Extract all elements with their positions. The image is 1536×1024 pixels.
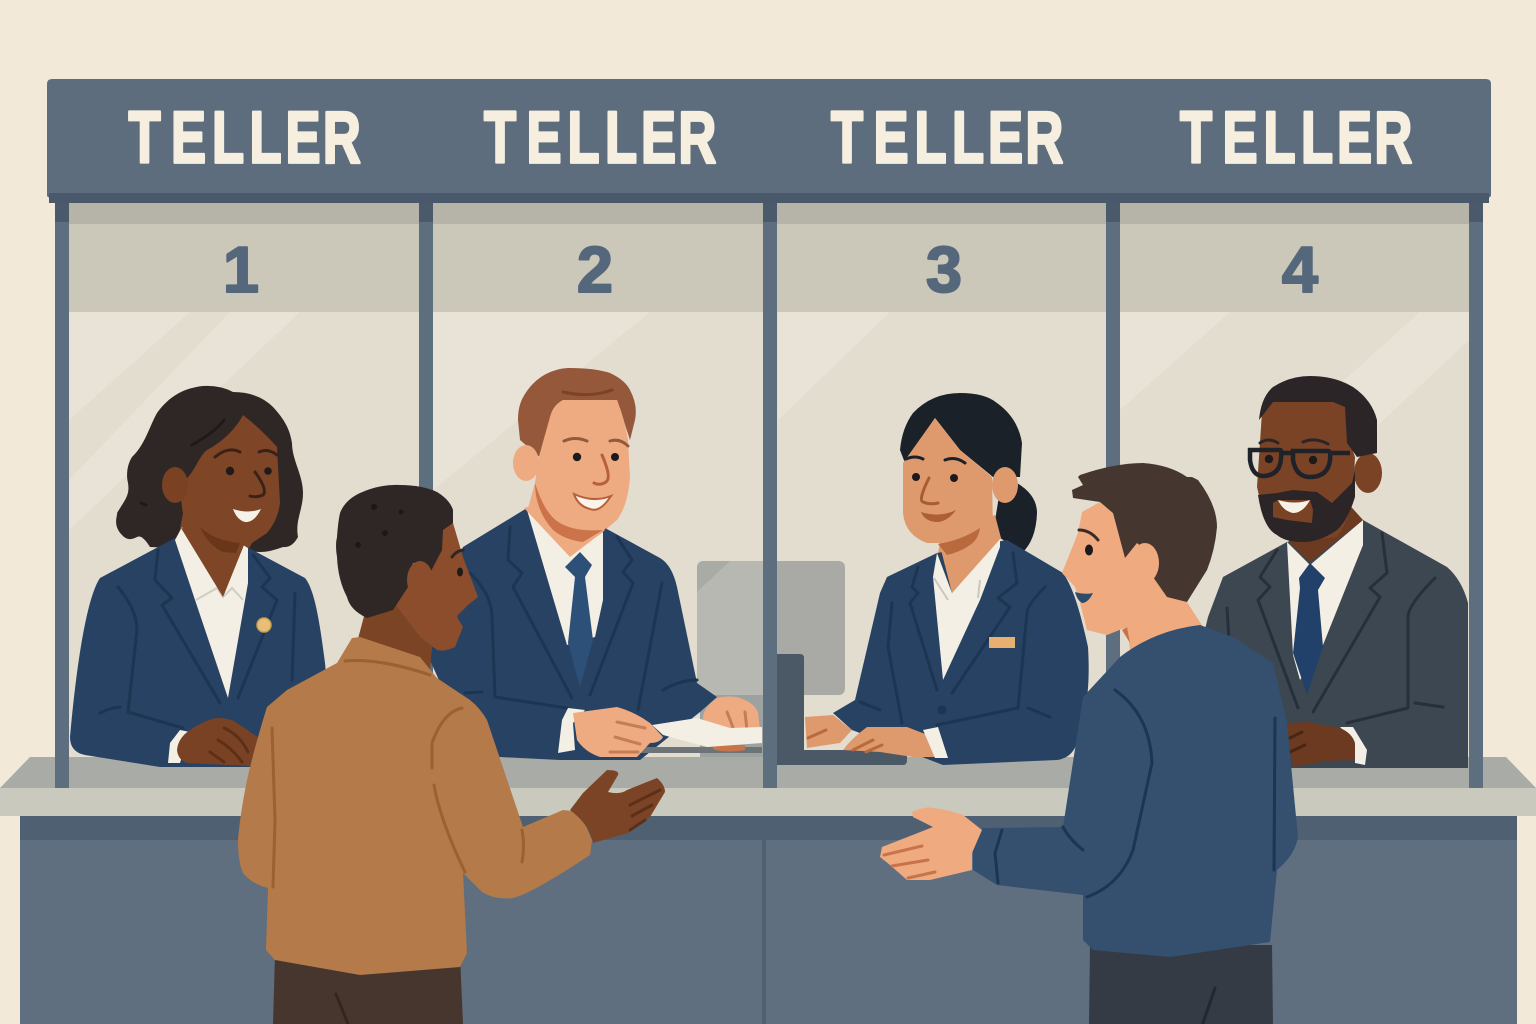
- teller 2: [430, 368, 762, 760]
- eyes: [912, 473, 958, 482]
- lapels: [860, 553, 1050, 725]
- brows: [564, 438, 628, 446]
- neck: [355, 600, 436, 670]
- teller 3: [805, 393, 1089, 765]
- eye: [1085, 544, 1093, 556]
- eye: [457, 568, 463, 576]
- smile: [574, 494, 611, 510]
- chin shadow: [938, 528, 980, 555]
- right hand: [843, 727, 935, 757]
- collar fold: [196, 588, 243, 600]
- cuff: [558, 708, 585, 753]
- ear: [1131, 543, 1159, 583]
- hand: [570, 770, 665, 843]
- ear: [1354, 453, 1382, 493]
- hand: [880, 808, 982, 880]
- hair: [900, 393, 1022, 477]
- beard: [1258, 470, 1355, 542]
- ear: [162, 467, 188, 503]
- right hand: [703, 696, 760, 730]
- hair strand: [141, 420, 224, 505]
- neck: [181, 528, 244, 597]
- face: [1257, 396, 1355, 542]
- collar fold: [934, 578, 980, 600]
- number 1: 1: [223, 233, 259, 306]
- eyes: [573, 453, 619, 461]
- smile: [233, 509, 261, 522]
- customer right: [880, 463, 1298, 1024]
- lapels: [100, 550, 295, 728]
- computer monitor: [697, 561, 845, 757]
- face: [392, 523, 478, 651]
- paper: [652, 718, 762, 747]
- laptop: [777, 654, 907, 765]
- sweater: [973, 625, 1298, 957]
- window number bands: [69, 202, 1469, 312]
- hair: [1072, 463, 1217, 602]
- mouth: [1075, 592, 1093, 603]
- smile: [921, 510, 956, 522]
- face: [903, 418, 1000, 593]
- neck: [936, 515, 1001, 593]
- brow: [452, 550, 463, 557]
- hair: [116, 386, 303, 552]
- hair: [518, 368, 636, 460]
- face: [528, 400, 630, 560]
- TELLER 2 label: TELLER: [484, 97, 716, 179]
- ear: [992, 467, 1018, 503]
- nose: [921, 478, 938, 504]
- tie: [1293, 563, 1325, 695]
- left hand: [573, 707, 663, 757]
- jacket: [430, 508, 717, 760]
- ear: [513, 445, 539, 481]
- shirt: [933, 537, 1000, 680]
- brows and nose: [215, 450, 277, 497]
- neck shadow: [1122, 627, 1130, 643]
- shirt: [1287, 520, 1363, 680]
- left hand: [805, 715, 852, 748]
- jacket: [1200, 520, 1468, 768]
- glasses: [1250, 450, 1350, 477]
- chin shadow: [200, 527, 240, 553]
- mouth: [457, 605, 468, 616]
- tie: [565, 552, 593, 687]
- teller windows glass: [69, 202, 1469, 762]
- cuff: [168, 730, 190, 763]
- number 3: 3: [926, 233, 962, 306]
- jacket: [833, 540, 1089, 765]
- teller 4: [1200, 376, 1468, 768]
- hand: [1287, 722, 1355, 767]
- hand: [177, 718, 262, 766]
- dark tray: [640, 747, 762, 753]
- ponytail: [993, 483, 1037, 553]
- button: [938, 706, 946, 714]
- hair specks: [355, 504, 404, 548]
- teller 1: [70, 386, 335, 767]
- neck and face: [1062, 502, 1205, 650]
- lapels: [465, 527, 697, 710]
- rear window posts: [419, 200, 1120, 760]
- number 4: 4: [1282, 233, 1318, 306]
- brows: [1260, 440, 1328, 444]
- eyes: [1265, 455, 1317, 464]
- counter: [0, 757, 1536, 1024]
- jacket: [70, 538, 335, 767]
- ear: [407, 561, 433, 599]
- smile: [1278, 500, 1310, 513]
- cuff: [1340, 727, 1367, 765]
- cuff: [923, 727, 948, 758]
- TELLER 4 label: TELLER: [1180, 97, 1412, 179]
- neck: [524, 500, 610, 557]
- TELLER 3 label: TELLER: [831, 97, 1063, 179]
- TELLER 1 label: TELLER: [128, 97, 361, 179]
- front window posts: [55, 200, 1483, 788]
- face: [178, 415, 280, 597]
- brows: [906, 457, 965, 463]
- trousers: [1089, 945, 1273, 1024]
- eyes: [226, 467, 272, 475]
- shirt: [175, 527, 248, 698]
- chin shadow: [535, 483, 603, 542]
- nose: [594, 455, 608, 484]
- sweater: [238, 637, 592, 975]
- number 2: 2: [577, 233, 613, 306]
- header sign: [47, 79, 1491, 203]
- brow: [1079, 530, 1098, 540]
- window numbers: [223, 233, 1318, 306]
- hair: [1259, 376, 1377, 457]
- sweater lines: [995, 690, 1275, 897]
- pin: [257, 618, 271, 632]
- lower finger: [710, 745, 745, 752]
- sweater lines: [272, 661, 524, 887]
- lapels: [1227, 533, 1443, 723]
- neck: [1287, 500, 1363, 562]
- shirt: [527, 510, 603, 645]
- hair: [336, 485, 453, 618]
- customer left: [238, 485, 665, 1024]
- trousers: [273, 955, 463, 1024]
- badge: [989, 637, 1015, 648]
